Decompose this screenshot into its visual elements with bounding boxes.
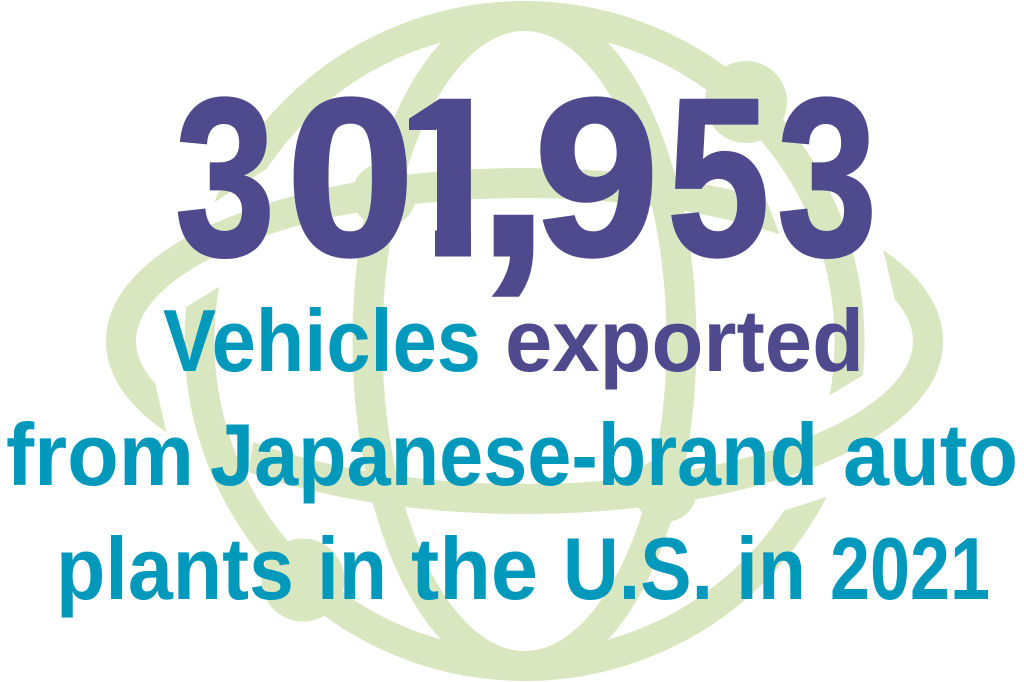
big number: 3 xyxy=(175,53,275,304)
big number: 0 xyxy=(286,52,415,303)
big number: 3 xyxy=(777,53,877,304)
icon: globe xyxy=(121,16,928,666)
line 1: exported xyxy=(505,291,864,390)
line 3: in xyxy=(317,519,387,618)
line 3: 2021 xyxy=(830,519,990,618)
line 3 xyxy=(56,519,990,618)
line 2 xyxy=(6,405,1018,504)
big number: , xyxy=(477,21,549,311)
line 1 xyxy=(163,291,864,390)
big number: 5 xyxy=(667,52,770,303)
line 3: the xyxy=(411,519,538,618)
line 3: U.S. xyxy=(563,519,713,618)
line 3: plants xyxy=(56,519,294,618)
text: description xyxy=(6,291,1018,618)
line 2: auto xyxy=(843,405,1018,504)
line 1: Vehicles xyxy=(163,291,481,390)
big number xyxy=(178,96,872,297)
big number: 1 xyxy=(386,51,511,303)
line 3: in xyxy=(736,519,806,618)
line 2: Japanese-brand xyxy=(210,405,818,504)
line 2: from xyxy=(6,405,194,504)
big number: 9 xyxy=(534,51,659,303)
